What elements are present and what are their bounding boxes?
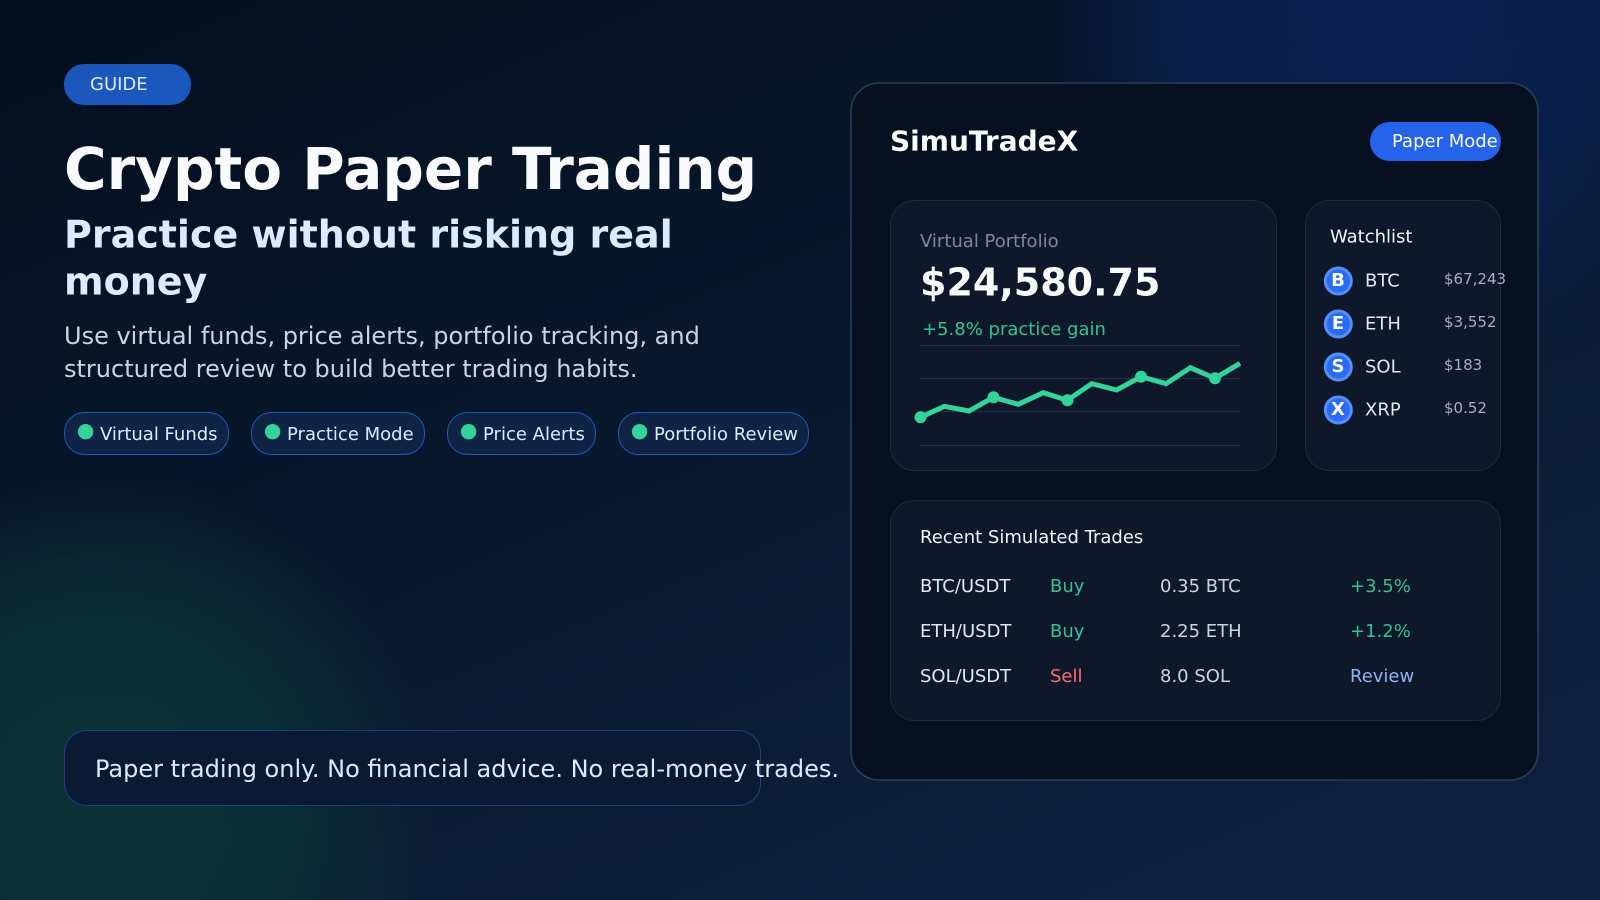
chip: virtual funds: Virtual Funds (100, 424, 218, 445)
row: XRP: $0.52 (1444, 399, 1487, 417)
row: XRP: X (1331, 399, 1345, 420)
app name: SimuTradeX (890, 124, 1079, 158)
chip: portfolio review (618, 412, 808, 454)
row: ETH: E (1332, 313, 1344, 334)
trade row: ETH (920, 621, 1411, 642)
disclaimer callout: Paper trading only. No financial advice. No real-money trades. (95, 755, 839, 783)
badge: paper mode (1370, 122, 1501, 161)
row: BTC: $67,243 (1444, 270, 1506, 288)
trade row: SOL: 8.0 SOL (1160, 666, 1230, 687)
row: SOL: SOL (1365, 357, 1401, 378)
disclaimer callout (64, 730, 839, 806)
trade row: BTC: +3.5% (1350, 576, 1411, 597)
chip: practice mode: Practice Mode (287, 424, 414, 445)
trades heading: Recent Simulated Trades (920, 527, 1143, 548)
trade row: ETH: ETH/USDT (920, 621, 1012, 642)
chip: price alerts (448, 412, 596, 454)
row: ETH: $3,552 (1444, 313, 1496, 331)
trade row: SOL (920, 666, 1414, 687)
watchlist heading: Watchlist (1330, 226, 1412, 248)
row: SOL: $183 (1444, 356, 1482, 374)
badge: paper mode: Paper Mode (1392, 131, 1498, 152)
trade row: ETH: +1.2% (1350, 621, 1411, 642)
panel: app mockup (851, 83, 1538, 780)
description: structured review to build better trading habits. (64, 355, 638, 383)
title: Crypto Paper Trading (64, 135, 757, 203)
row: BTC (1325, 268, 1506, 294)
description: Use virtual funds, price alerts, portfolio tracking, and (64, 322, 700, 350)
line chart: portfolio growth (914, 346, 1241, 446)
chip: portfolio review: Portfolio Review (654, 424, 798, 445)
panel: watchlist (1306, 200, 1506, 470)
panel: virtual portfolio (890, 200, 1276, 470)
row: ETH: ETH (1365, 314, 1401, 335)
row: XRP (1325, 397, 1487, 423)
trade row: BTC: BTC/USDT (920, 576, 1011, 597)
portfolio gain: +5.8% practice gain (922, 319, 1106, 340)
row: BTC: BTC (1365, 271, 1400, 292)
chip: practice mode (252, 412, 424, 454)
row: ETH (1325, 311, 1496, 337)
trade row: ETH: 2.25 ETH (1160, 621, 1242, 642)
subtitle: Practice without risking real (64, 212, 673, 256)
row: SOL: S (1332, 356, 1344, 377)
feature chips (64, 412, 808, 454)
row: SOL (1325, 354, 1482, 380)
chip: price alerts: Price Alerts (483, 424, 585, 445)
trade row: ETH: Buy (1050, 621, 1085, 642)
trade row: BTC: Buy (1050, 576, 1085, 597)
subtitle: money (64, 260, 208, 304)
trade row: BTC: 0.35 BTC (1160, 576, 1241, 597)
badge: guide (64, 64, 191, 105)
badge: guide: GUIDE (90, 74, 148, 95)
chip: virtual funds (64, 412, 228, 454)
trade row: SOL: Sell (1050, 666, 1083, 687)
trade row: SOL: SOL/USDT (920, 666, 1012, 687)
trade row: BTC (920, 576, 1411, 597)
portfolio value: $24,580.75 (920, 260, 1160, 304)
portfolio label: Virtual Portfolio (920, 231, 1059, 252)
panel: recent simulated trades (890, 500, 1500, 720)
row: BTC: B (1331, 270, 1345, 291)
row: XRP: XRP (1365, 400, 1401, 421)
trade row: SOL: Review (1350, 666, 1414, 687)
